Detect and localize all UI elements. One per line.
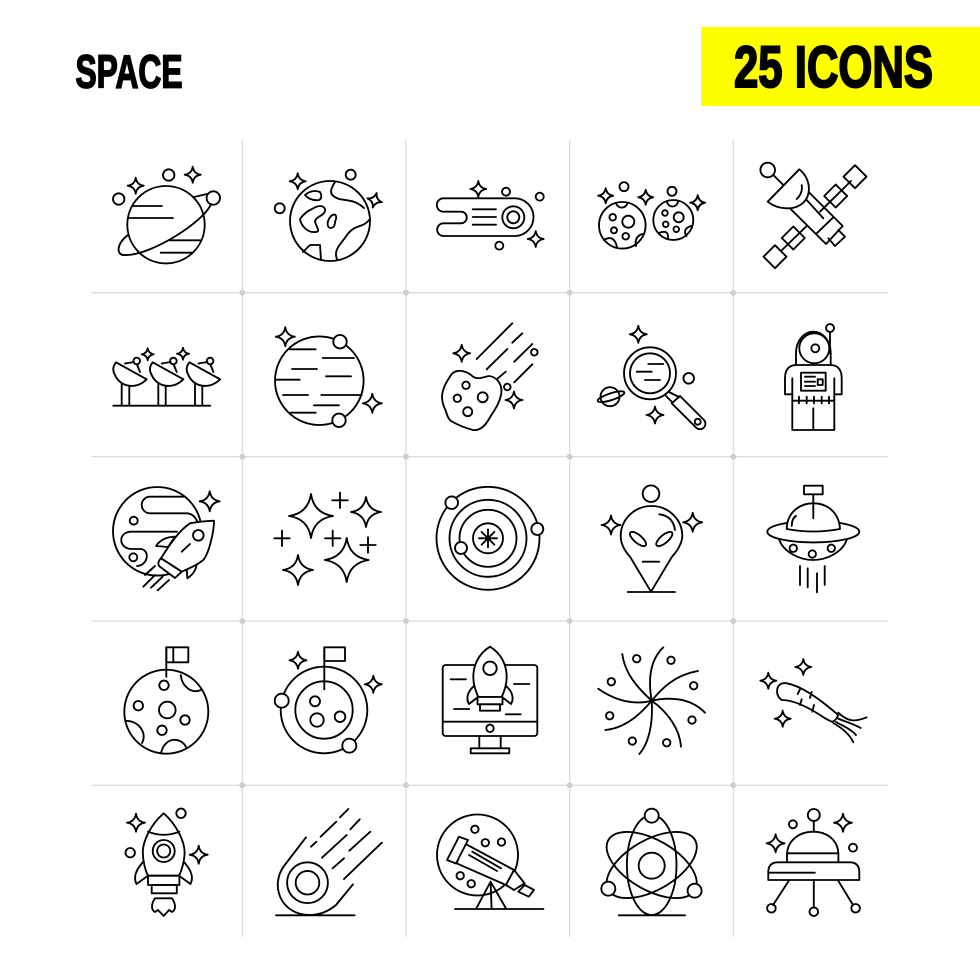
title: SPACE bbox=[76, 46, 182, 98]
icon: radar dishes bbox=[113, 348, 220, 406]
icon: space bacterium bbox=[760, 659, 867, 742]
icon: planet with moons bbox=[275, 327, 382, 427]
icon: solar system bbox=[436, 487, 543, 590]
icon: astronaut bbox=[785, 324, 842, 430]
icon: lander ufo bbox=[767, 809, 860, 916]
icon: rocket bbox=[126, 809, 208, 916]
icon: spiral galaxy bbox=[598, 647, 705, 754]
icon: stars bbox=[274, 493, 381, 585]
icon: monitor with rocket bbox=[443, 647, 537, 753]
icon: magnifier bbox=[597, 326, 705, 429]
icon: earth bbox=[275, 170, 384, 261]
icon: two moons bbox=[598, 182, 705, 249]
icon: rocket and planet bbox=[113, 487, 220, 590]
icon: asteroid bbox=[442, 323, 538, 430]
icon: comet bbox=[437, 181, 544, 250]
icon: flying saucer bbox=[767, 486, 859, 592]
icon: ringed planet bbox=[113, 167, 220, 263]
icon: orbit with flag bbox=[275, 647, 382, 753]
icon: atom bbox=[596, 809, 708, 915]
icon: alien bbox=[602, 485, 702, 592]
icon: falling comet bbox=[276, 809, 382, 915]
icon: telescope bbox=[437, 814, 543, 909]
icon: satellite bbox=[760, 163, 866, 268]
icon: moon with flag bbox=[124, 647, 208, 754]
